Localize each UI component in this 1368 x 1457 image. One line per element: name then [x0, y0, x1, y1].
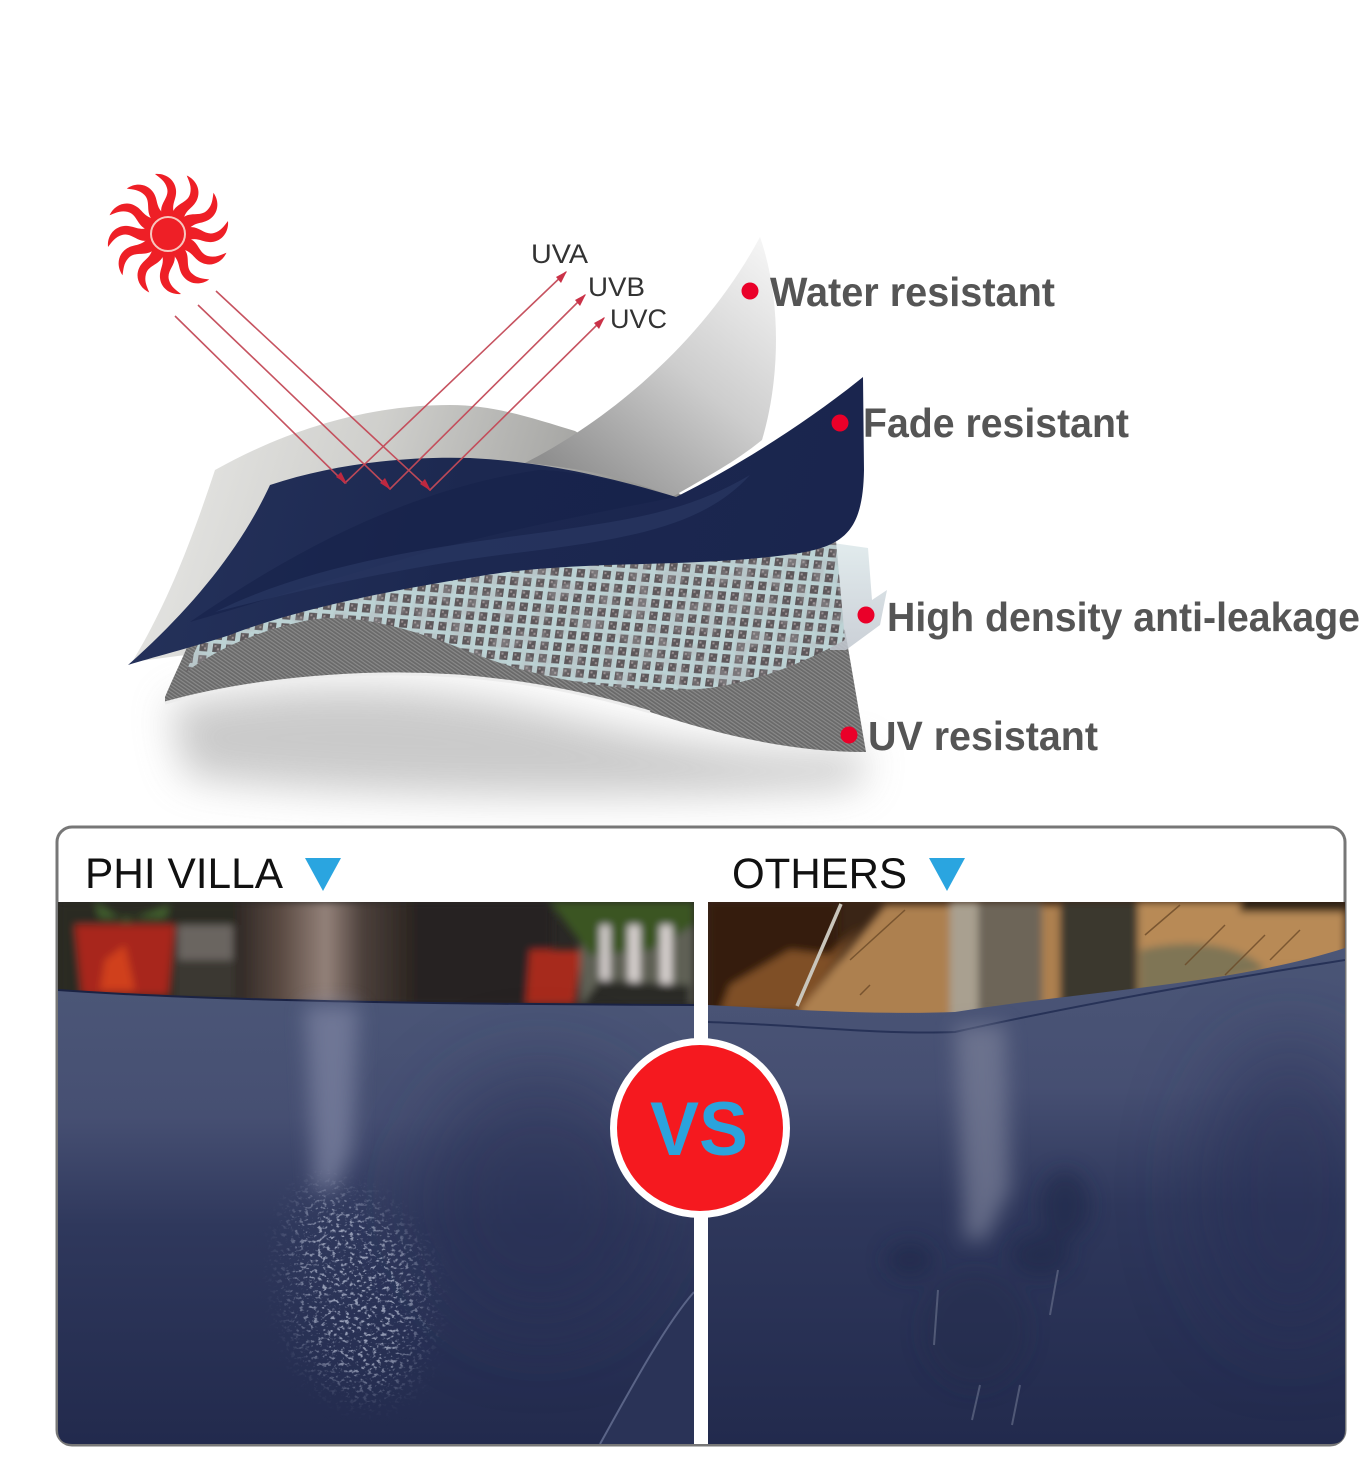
fabric surface	[58, 990, 694, 1444]
navy fade resistant layer	[128, 377, 864, 665]
high density mesh layer	[186, 542, 887, 690]
callout: water resistant: Water resistant	[770, 269, 1055, 315]
panel: comparison	[57, 827, 1368, 1445]
leak drips	[934, 1270, 1058, 1425]
callout: high density anti-leakage: High density anti-leakage	[887, 594, 1360, 640]
icon: blue triangle left	[305, 858, 341, 891]
photo: OTHERS fabric under water jet	[708, 902, 1368, 1444]
UVB label: UVB	[588, 272, 645, 302]
panel frame	[57, 827, 1345, 1445]
white edge of weave layer	[165, 674, 650, 712]
water jet	[955, 1025, 1010, 1240]
leak stains	[899, 1172, 1085, 1268]
water jet	[305, 1005, 358, 1190]
heading: PHI VILLA: PHI VILLA	[85, 850, 283, 898]
deck plank lines	[850, 905, 1300, 995]
callout: fade resistant: Fade resistant	[863, 400, 1129, 446]
divider	[694, 902, 708, 1444]
icon: sun	[108, 174, 228, 294]
VS badge	[610, 1038, 790, 1218]
UVA label: UVA	[531, 239, 588, 269]
splash speckles	[272, 1180, 441, 1408]
grey water resistant back layer	[132, 237, 776, 662]
hem seam	[602, 1416, 694, 1444]
layered fabric diagram	[108, 174, 887, 795]
grey weave UV resistant layer	[165, 600, 866, 752]
icon: blue triangle right	[929, 858, 965, 891]
VS badge: VS	[650, 1087, 748, 1172]
heading: OTHERS: OTHERS	[732, 850, 907, 898]
fabric surface	[708, 948, 1345, 1444]
UVC label: UVC	[610, 304, 667, 334]
ground shadow	[170, 687, 865, 795]
callout: UV resistant: UV resistant	[868, 713, 1098, 759]
photo: PHI VILLA fabric under water jet	[58, 902, 694, 1444]
tent pole	[797, 904, 841, 1006]
arrows: UV rays reflecting	[175, 271, 605, 491]
